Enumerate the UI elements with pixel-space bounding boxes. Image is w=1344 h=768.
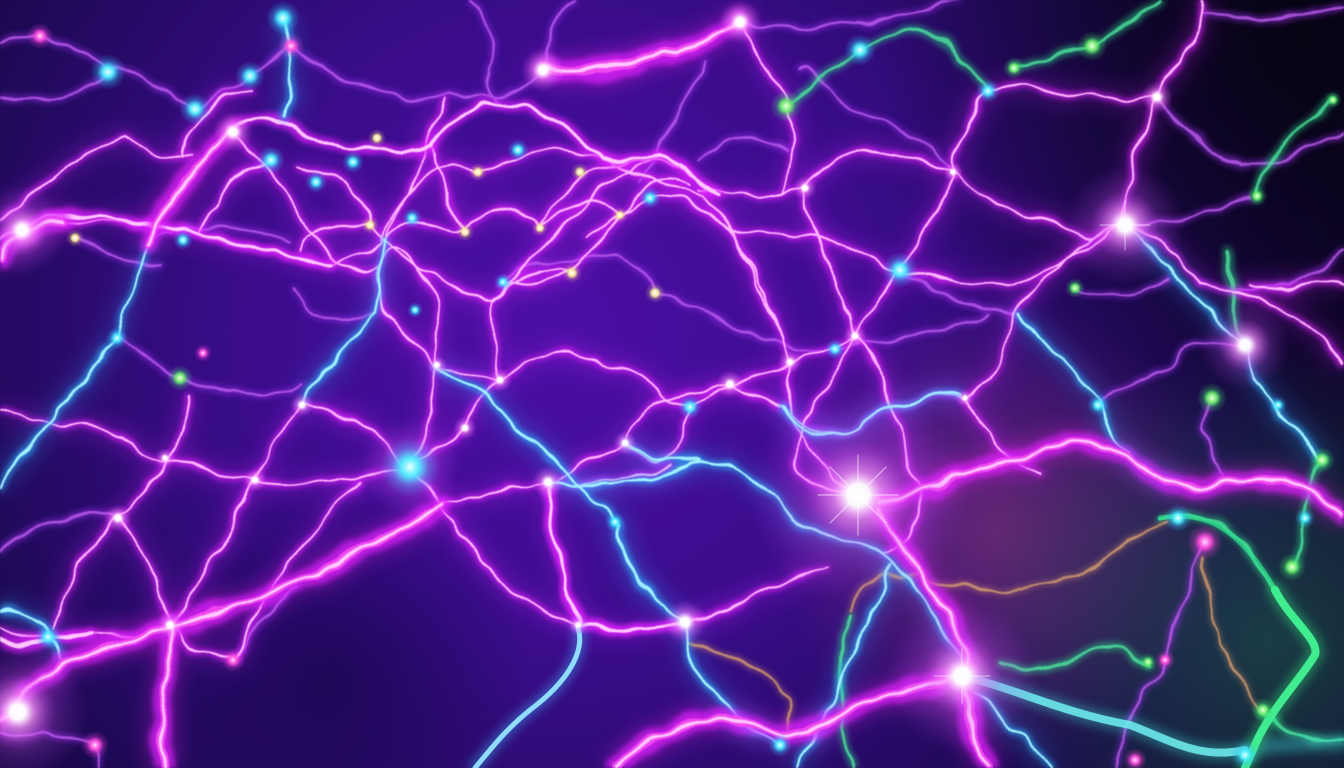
warm orange filaments (690, 522, 1262, 735)
thick cyan and green foreground strands (475, 516, 1344, 768)
starburst rays (818, 200, 1150, 704)
light nodes: pale yellow (66, 129, 665, 303)
medium magenta filaments (0, 105, 720, 642)
green filaments (786, 0, 1344, 768)
